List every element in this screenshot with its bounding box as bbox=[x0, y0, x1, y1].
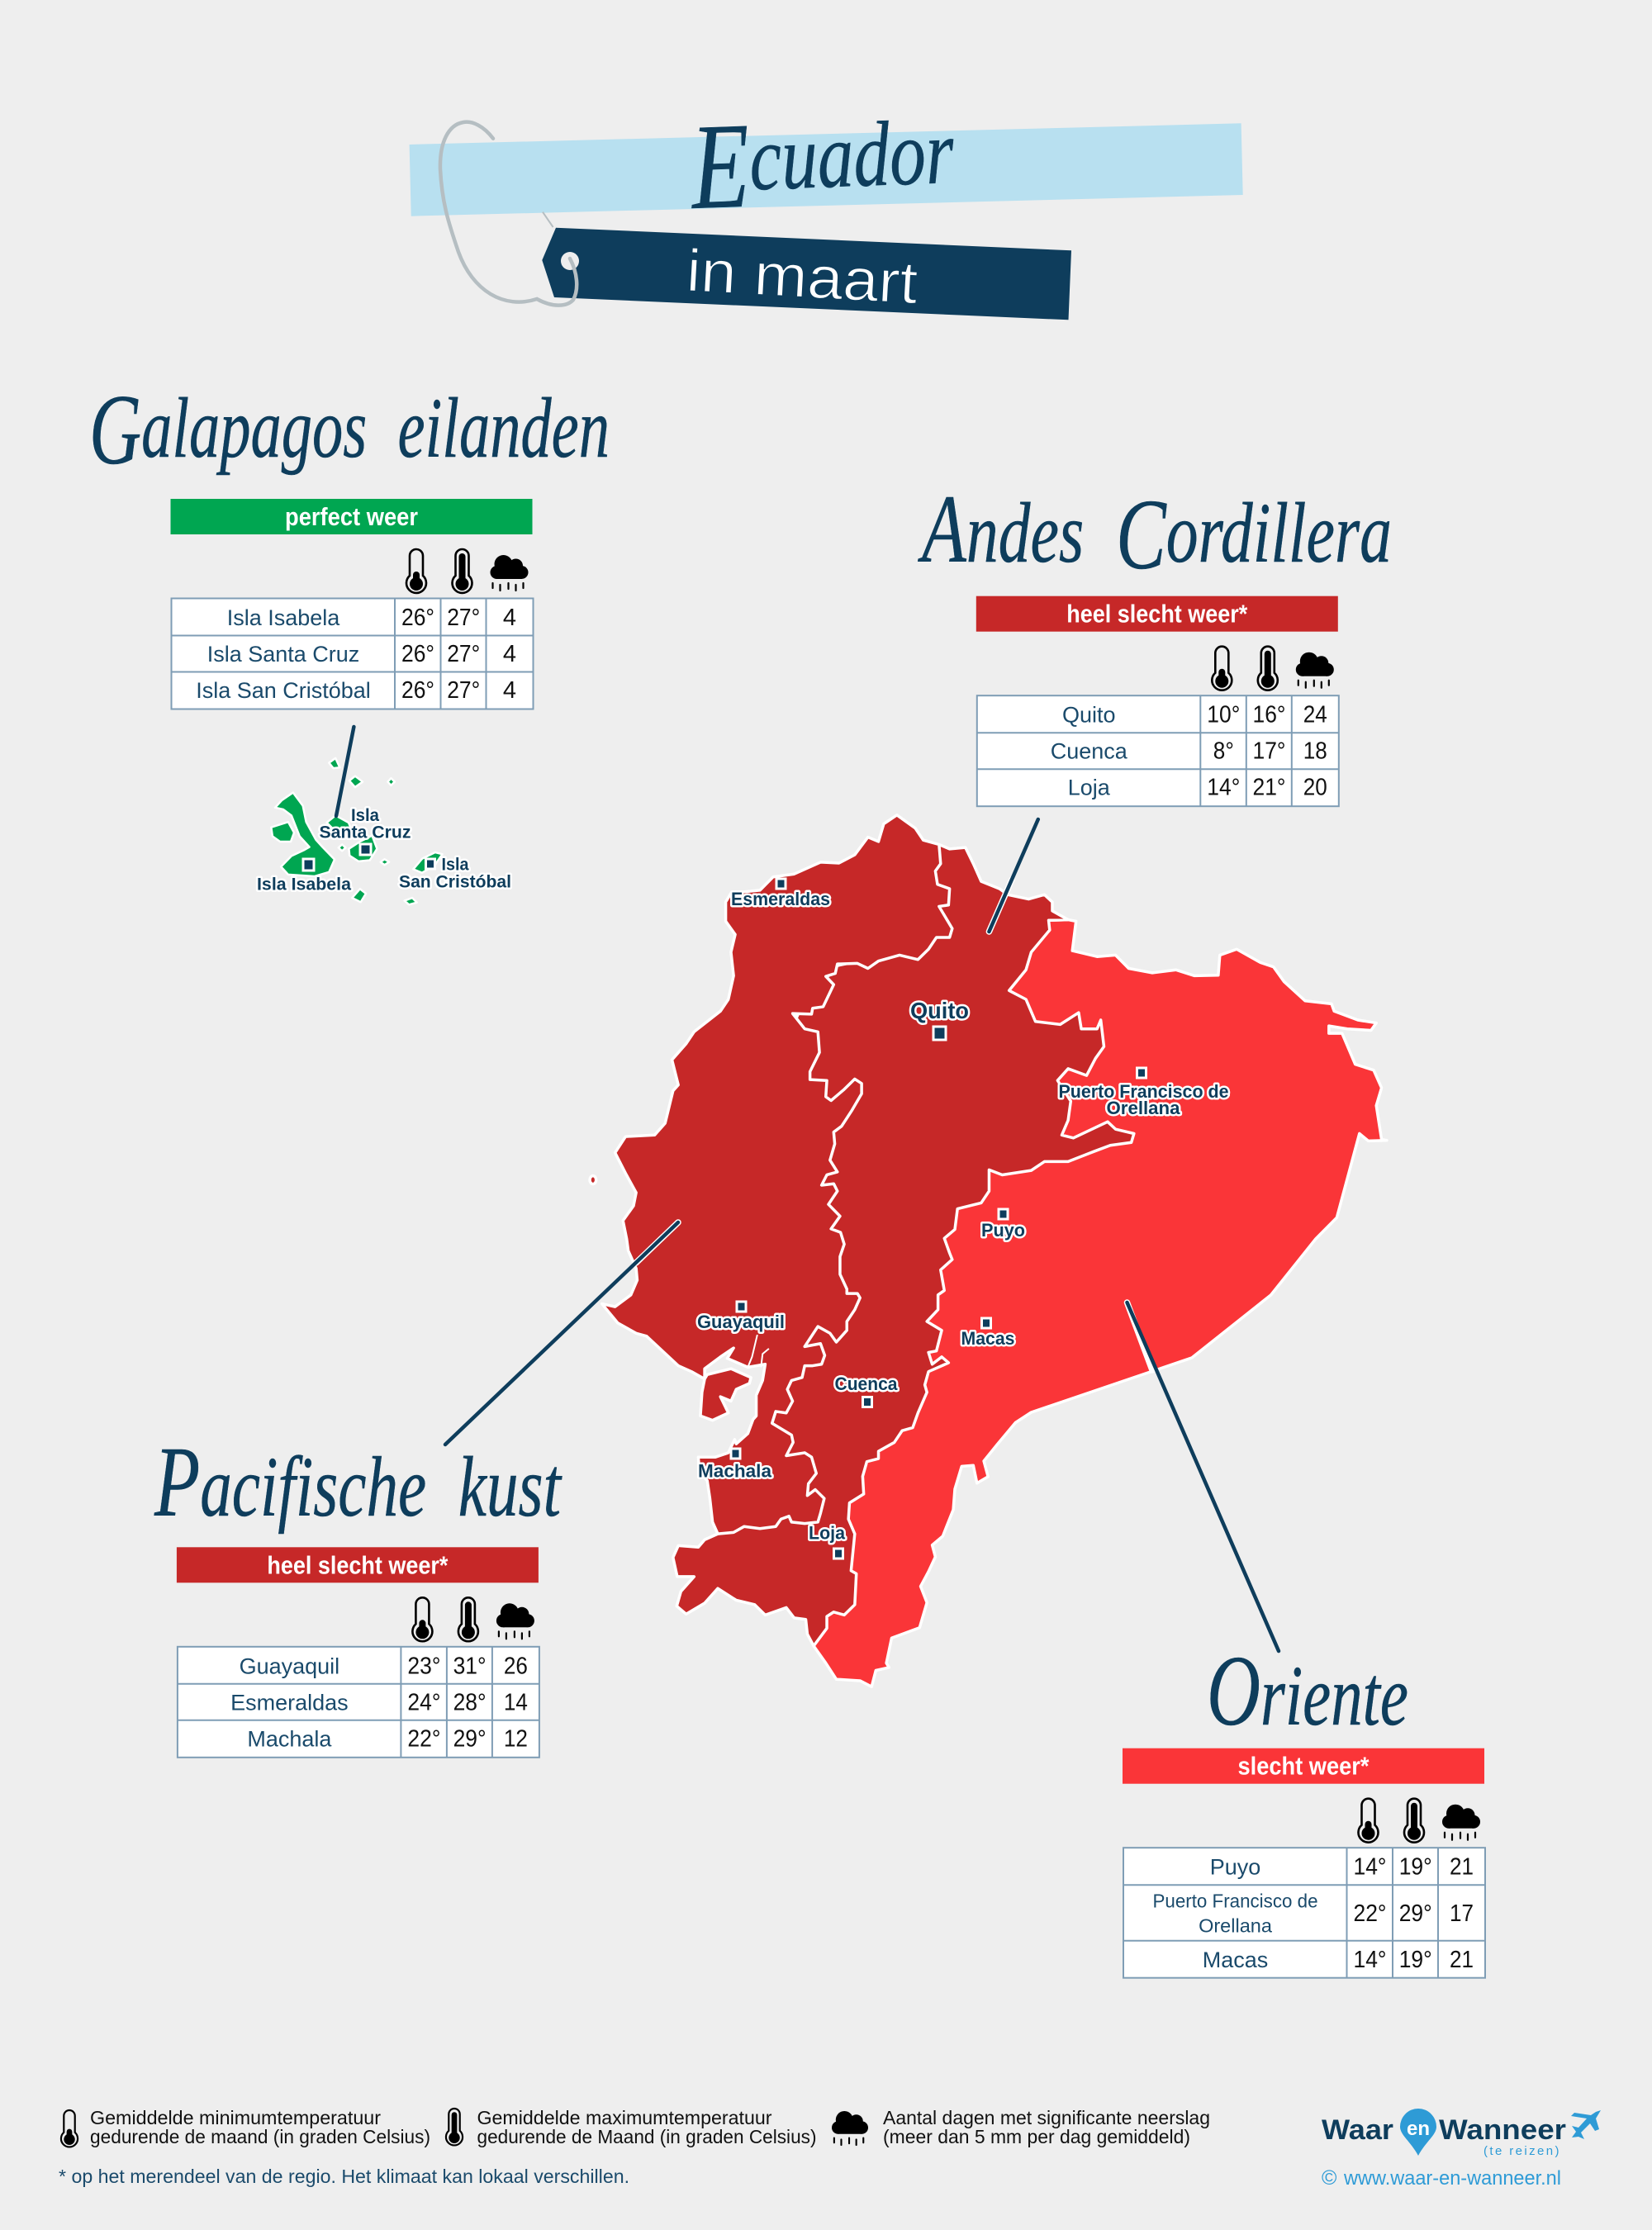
heading: Andes Cordillera: Andes bbox=[922, 475, 1123, 583]
tag string bbox=[440, 122, 577, 306]
legend: minimum temperature: gedurende de maand (in graden Celsius) bbox=[90, 2126, 430, 2147]
city: Esmeraldas: Esmeraldas bbox=[731, 889, 830, 909]
table cells: Isla San Cristóbal bbox=[196, 678, 371, 703]
heading: Ecuador: cuador bbox=[748, 101, 956, 210]
panel: Pacifische kust bbox=[154, 1426, 563, 1758]
table cells: 19° bbox=[1399, 1947, 1432, 1973]
table cells: 23° bbox=[407, 1653, 440, 1679]
legend: rain bbox=[832, 2107, 1210, 2147]
table cells: 24° bbox=[407, 1689, 440, 1715]
table cells: 22° bbox=[407, 1725, 440, 1752]
weather table bbox=[1123, 1748, 1485, 1978]
table cells: 28° bbox=[453, 1689, 487, 1715]
table cells bbox=[178, 1647, 539, 1758]
tag bbox=[542, 228, 1071, 320]
weather table bbox=[976, 596, 1339, 806]
panel: Oriente bbox=[1123, 1635, 1485, 1978]
estuary line bbox=[748, 1335, 769, 1367]
banner bbox=[170, 499, 532, 534]
map of mainland Ecuador bbox=[590, 815, 1387, 1687]
label: Isla San Cristobal bbox=[399, 856, 511, 891]
table cells: 29° bbox=[1399, 1900, 1432, 1927]
table cells: 20 bbox=[1303, 775, 1327, 801]
table cells: 26° bbox=[401, 677, 434, 704]
logo tagline: (te reizen) bbox=[1483, 2144, 1561, 2158]
table cells: 4 bbox=[503, 641, 516, 667]
label: Isla Santa Cruz bbox=[319, 806, 411, 855]
banner: heel slecht weer* bbox=[267, 1550, 449, 1579]
table cells: Esmeraldas bbox=[230, 1690, 349, 1715]
title band bbox=[410, 123, 1243, 216]
arrow: Andes leader bbox=[989, 819, 1038, 932]
city: Cuenca bbox=[834, 1374, 898, 1407]
logo pin bbox=[1400, 2109, 1436, 2156]
table cells: 17° bbox=[1253, 738, 1286, 765]
table cells: Puyo bbox=[1210, 1855, 1260, 1880]
legend: minimum temperature: Gemiddelde minimumtemperatuur bbox=[90, 2107, 381, 2128]
legend: rain: Aantal dagen met significante neerslag bbox=[883, 2107, 1210, 2128]
subheading: in maart: in maart bbox=[685, 238, 919, 316]
table cells: 21° bbox=[1253, 775, 1286, 801]
table cells: 16° bbox=[1253, 702, 1286, 728]
city: Macas bbox=[961, 1318, 1014, 1349]
banner: slecht weer* bbox=[1237, 1752, 1370, 1781]
island: Puna bbox=[700, 1369, 751, 1421]
region: Andes bbox=[673, 844, 1134, 1646]
legend: rain: (meer dan 5 mm per dag gemiddeld) bbox=[883, 2126, 1190, 2147]
table cells: 10° bbox=[1207, 702, 1240, 728]
table cells: 22° bbox=[1353, 1900, 1386, 1927]
legend bbox=[59, 2107, 1210, 2187]
table cells bbox=[977, 695, 1339, 806]
legend: maximum temperature: Gemiddelde maximumtemperatuur bbox=[477, 2107, 772, 2128]
table cells: 19° bbox=[1399, 1854, 1432, 1881]
table cells: 17 bbox=[1450, 1900, 1474, 1927]
table cells: 21 bbox=[1450, 1854, 1474, 1881]
table cells: 14° bbox=[1207, 775, 1240, 801]
city: Loja bbox=[809, 1523, 846, 1559]
table cells: 27° bbox=[447, 605, 480, 631]
city: Macas: Macas bbox=[961, 1328, 1014, 1349]
string tail bbox=[543, 212, 553, 227]
weather table bbox=[170, 499, 534, 709]
arrow: Oriente leader bbox=[1127, 1302, 1279, 1651]
label: Isla Isabela bbox=[257, 859, 351, 894]
table cells: Isla Santa Cruz bbox=[207, 642, 359, 667]
tag hole bbox=[561, 252, 579, 270]
icons bbox=[412, 1597, 534, 1641]
weather table bbox=[177, 1547, 539, 1758]
table cells: Machala bbox=[247, 1726, 332, 1751]
region: Pacific coast bbox=[602, 815, 952, 1534]
city: Cuenca: Cuenca bbox=[834, 1374, 898, 1394]
table cells: 14° bbox=[1353, 1854, 1386, 1881]
city: Loja: Loja bbox=[809, 1523, 846, 1544]
label: Isla Santa Cruz: Santa Cruz bbox=[319, 823, 411, 842]
panel: Galapagos bbox=[89, 374, 610, 709]
banner bbox=[177, 1547, 539, 1582]
small islet bbox=[590, 1176, 596, 1184]
heading: Andes Cordillera: C bbox=[1116, 479, 1167, 591]
arrow: Pacific leader bbox=[445, 1222, 678, 1445]
region: Oriente bbox=[814, 920, 1387, 1687]
arrow: Galapagos leader bbox=[336, 727, 354, 816]
table cells: Cuenca bbox=[1051, 739, 1128, 764]
table cells: Orellana bbox=[1199, 1915, 1273, 1937]
table cells: Isla Isabela bbox=[227, 605, 340, 630]
icons bbox=[1358, 1799, 1480, 1843]
city: Guayaquil bbox=[697, 1302, 785, 1332]
icons bbox=[1212, 647, 1334, 690]
icon: plane bbox=[1571, 2110, 1601, 2139]
table cells: 8° bbox=[1213, 738, 1234, 765]
table cells bbox=[172, 598, 534, 709]
table cells: 14 bbox=[504, 1689, 528, 1715]
city: Machala: Machala bbox=[698, 1461, 772, 1482]
city: Quito: Quito bbox=[910, 998, 969, 1023]
heading: Ecuador: E bbox=[687, 97, 752, 235]
table cells: 27° bbox=[447, 641, 480, 667]
copyright sign: © bbox=[1322, 2166, 1337, 2190]
small islands bbox=[329, 758, 417, 904]
city: Puerto Francisco de Orellana: Puerto Francisco de bbox=[1059, 1081, 1229, 1102]
city: Esmeraldas bbox=[731, 879, 830, 909]
table cells: 4 bbox=[503, 677, 516, 704]
city: Puerto Francisco de Orellana: Orellana bbox=[1107, 1098, 1180, 1118]
label: Isla San Cristobal: Isla bbox=[441, 856, 469, 875]
table cells: 27° bbox=[447, 677, 480, 704]
island: Isabela bbox=[275, 793, 335, 876]
table cells: 31° bbox=[453, 1653, 487, 1679]
table cells: 24 bbox=[1303, 702, 1327, 728]
island: San Cristobal bbox=[413, 852, 443, 873]
table cells: Loja bbox=[1068, 776, 1111, 800]
icons bbox=[406, 549, 529, 593]
map labels mainland bbox=[697, 879, 1229, 1559]
table cells: 26° bbox=[401, 605, 434, 631]
label: Isla Santa Cruz: Isla bbox=[351, 806, 379, 825]
heading: Galapagos eilanden: G bbox=[89, 374, 141, 486]
panel: Andes Cordillera bbox=[918, 475, 1392, 806]
legend: maximum temperature: gedurende de Maand (in graden Celsius) bbox=[477, 2126, 816, 2147]
island: Santiago bbox=[327, 815, 351, 830]
table cells: 12 bbox=[504, 1725, 528, 1752]
island: Fernandina bbox=[271, 822, 294, 842]
label: Isla San Cristobal: San Cristóbal bbox=[399, 872, 511, 891]
table cells: Guayaquil bbox=[240, 1654, 339, 1678]
table cells bbox=[1123, 1848, 1485, 1978]
city: Quito bbox=[910, 998, 969, 1040]
city: Machala bbox=[698, 1449, 772, 1482]
city: Puyo: Puyo bbox=[981, 1220, 1025, 1241]
banner bbox=[1123, 1748, 1484, 1784]
table cells: 14° bbox=[1353, 1947, 1386, 1973]
table cells: Macas bbox=[1203, 1948, 1268, 1972]
logo word: en: en bbox=[1407, 2118, 1430, 2140]
heading: Andes Cordillera: ordillera bbox=[1166, 486, 1392, 581]
heading: Pacifische kust: Pacifische kust bbox=[154, 1426, 563, 1538]
logo word: Waar: Waar bbox=[1322, 2114, 1393, 2146]
banner bbox=[976, 596, 1338, 632]
logo bbox=[1322, 2109, 1601, 2190]
table cells: 26 bbox=[504, 1653, 528, 1679]
city: Guayaquil: Guayaquil bbox=[697, 1312, 785, 1332]
footnote: * op het merendeel van de regio. Het klimaat kan lokaal verschillen. bbox=[59, 2166, 629, 2187]
table cells: Puerto Francisco de bbox=[1153, 1891, 1318, 1912]
heading: Galapagos eilanden: alapagos eilanden bbox=[141, 381, 610, 476]
city: Puerto Francisco de Orellana bbox=[1059, 1068, 1229, 1118]
website: www.waar-en-wanneer.nl bbox=[1343, 2167, 1561, 2190]
table cells: 18 bbox=[1303, 738, 1327, 765]
city: Puyo bbox=[981, 1209, 1025, 1241]
heading: Oriente: Oriente bbox=[1207, 1635, 1408, 1747]
table cells: 21 bbox=[1450, 1947, 1474, 1973]
island: Santa Cruz bbox=[349, 836, 377, 861]
table cells: 4 bbox=[503, 605, 516, 631]
banner: perfect weer bbox=[285, 502, 418, 531]
banner: heel slecht weer* bbox=[1066, 600, 1248, 629]
map of Galapagos islands bbox=[257, 727, 511, 904]
label: Isla Isabela: Isla Isabela bbox=[257, 875, 351, 894]
table cells: 26° bbox=[401, 641, 434, 667]
legend: maximum temperature bbox=[446, 2107, 816, 2147]
title tag bbox=[410, 90, 1243, 320]
logo word: Wanneer: Wanneer bbox=[1439, 2114, 1566, 2146]
table cells: Quito bbox=[1062, 703, 1116, 728]
legend: minimum temperature bbox=[61, 2107, 430, 2147]
table cells: 29° bbox=[453, 1725, 487, 1752]
